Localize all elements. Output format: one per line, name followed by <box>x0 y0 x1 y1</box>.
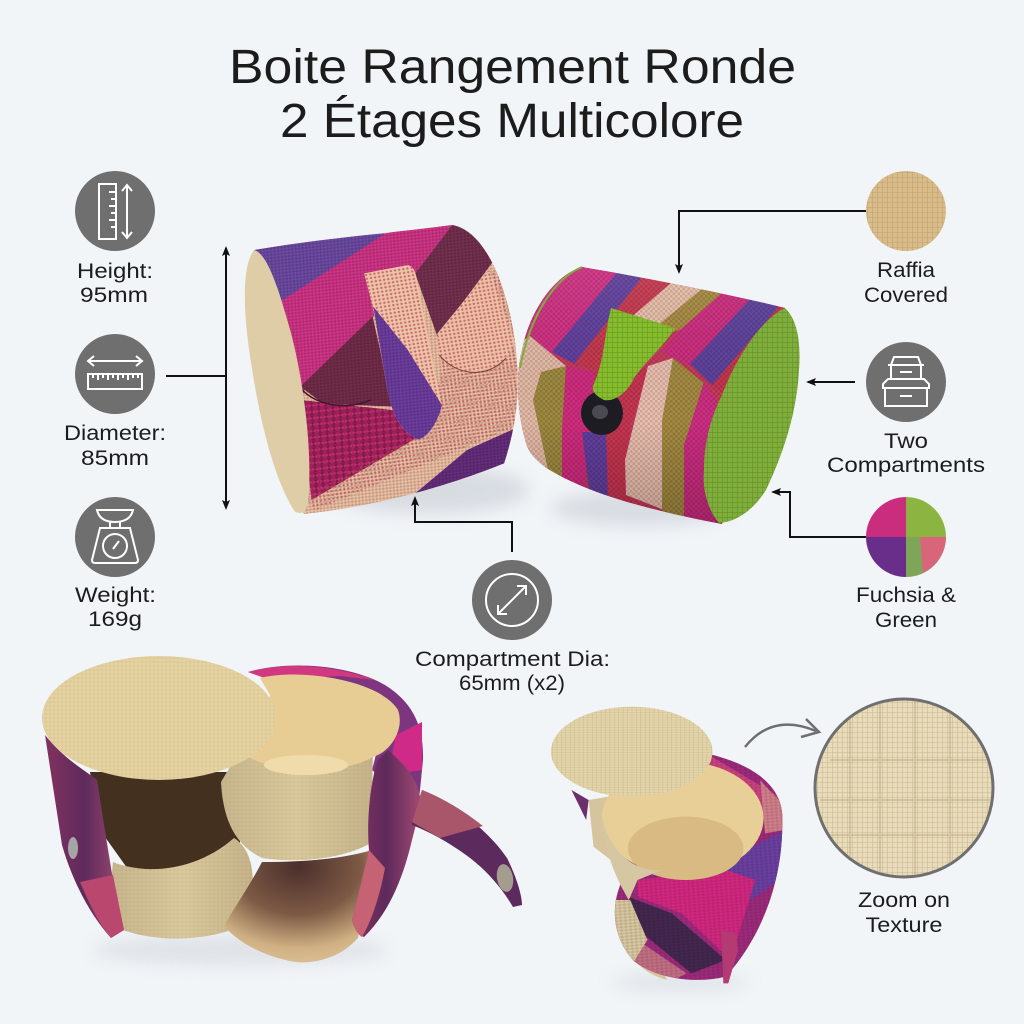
shadow under open boxes <box>90 934 750 992</box>
interior cavity <box>90 772 240 872</box>
inner cylinder front <box>602 813 662 900</box>
title: 2 Étages Multicolore <box>280 95 744 148</box>
spec: diameter <box>64 334 166 470</box>
label: height: 95mm <box>80 284 148 307</box>
upper cylinder interior <box>248 675 400 770</box>
top lid disk <box>42 656 276 780</box>
product: closed box left <box>244 225 518 514</box>
label: diameter <box>64 422 166 470</box>
icon: stacked boxes <box>866 342 946 422</box>
arrow: diameter leader <box>166 375 226 377</box>
label: fuchsia and green <box>856 584 956 632</box>
label: raffia: Raffia <box>877 259 935 282</box>
label: weight: Weight: <box>75 584 156 607</box>
label: zoom on texture: Texture <box>866 914 942 937</box>
beige flap curve <box>437 270 515 372</box>
shadow under boxes <box>330 466 730 526</box>
spec: weight <box>75 497 156 631</box>
arrow: compartments leader <box>808 381 855 383</box>
zoom circle: raffia texture <box>815 699 993 880</box>
arrow: curved zoom arrow <box>745 725 816 747</box>
label: height: Height: <box>77 260 153 283</box>
label: zoom on texture: Zoom on <box>858 889 950 912</box>
label: compartment diameter: 65mm (x2) <box>459 672 565 695</box>
lid bands <box>526 267 616 356</box>
spec: height <box>75 171 155 307</box>
green end face <box>704 308 800 523</box>
icon: circle with diagonal arrow <box>472 560 552 640</box>
strap with purple tip <box>364 265 442 439</box>
title <box>229 41 796 148</box>
icon: ruler with horizontal arrow <box>75 334 155 414</box>
label: two compartments <box>827 430 985 477</box>
button and green tab <box>581 308 675 435</box>
base bands <box>518 336 566 472</box>
title: Boite Rangement Ronde <box>229 41 796 94</box>
callout: raffia covered <box>864 171 948 307</box>
label: diameter: 85mm <box>81 447 149 470</box>
callout: two compartments <box>827 342 985 477</box>
bottom raffia section <box>589 797 667 980</box>
strap with snap <box>412 790 522 907</box>
arrow: compartment leader <box>415 498 512 552</box>
raffia end face <box>245 250 309 513</box>
striped body <box>518 267 785 524</box>
callout: fuchsia and green <box>856 497 956 632</box>
label: zoom on texture <box>858 889 950 937</box>
wrap strip right <box>352 750 421 937</box>
upper cylinder <box>221 750 373 860</box>
label: fuchsia and green: Green <box>875 609 937 632</box>
arrow: raffia leader <box>679 211 866 272</box>
strap tip <box>721 930 738 983</box>
green rim <box>520 267 582 368</box>
callout: compartment diameter <box>415 560 610 695</box>
product: open box two compartments <box>42 656 522 962</box>
icon: ruler with vertical arrow <box>75 171 155 251</box>
icon: kitchen scale <box>75 497 155 577</box>
label: weight <box>75 584 156 631</box>
label: raffia <box>864 259 948 307</box>
inner opening <box>602 762 764 875</box>
label: compartment diameter <box>415 648 610 695</box>
outer wrap <box>614 754 782 980</box>
product: open box side view <box>551 707 790 987</box>
label: diameter: Diameter: <box>64 422 166 445</box>
label: weight: 169g <box>88 608 142 631</box>
wrap strip left <box>45 735 124 938</box>
label: raffia: Covered <box>864 284 948 307</box>
swatch: colour quadrants <box>866 497 946 577</box>
label: height <box>77 260 153 307</box>
bottom disk <box>224 850 372 962</box>
woven body <box>254 225 518 514</box>
swatch: raffia texture <box>866 171 946 251</box>
product: closed box right <box>518 266 800 524</box>
lid disk <box>551 707 713 797</box>
arrow: colour leader <box>773 492 866 537</box>
label: fuchsia and green: Fuchsia & <box>856 584 956 607</box>
lower cylinder <box>112 838 253 939</box>
back wrap <box>248 666 423 810</box>
label: two compartments: Compartments <box>827 454 985 477</box>
arrow: height dimension <box>225 248 227 508</box>
label: compartment diameter: Compartment Dia: <box>415 648 610 671</box>
label: two compartments: Two <box>884 430 928 453</box>
